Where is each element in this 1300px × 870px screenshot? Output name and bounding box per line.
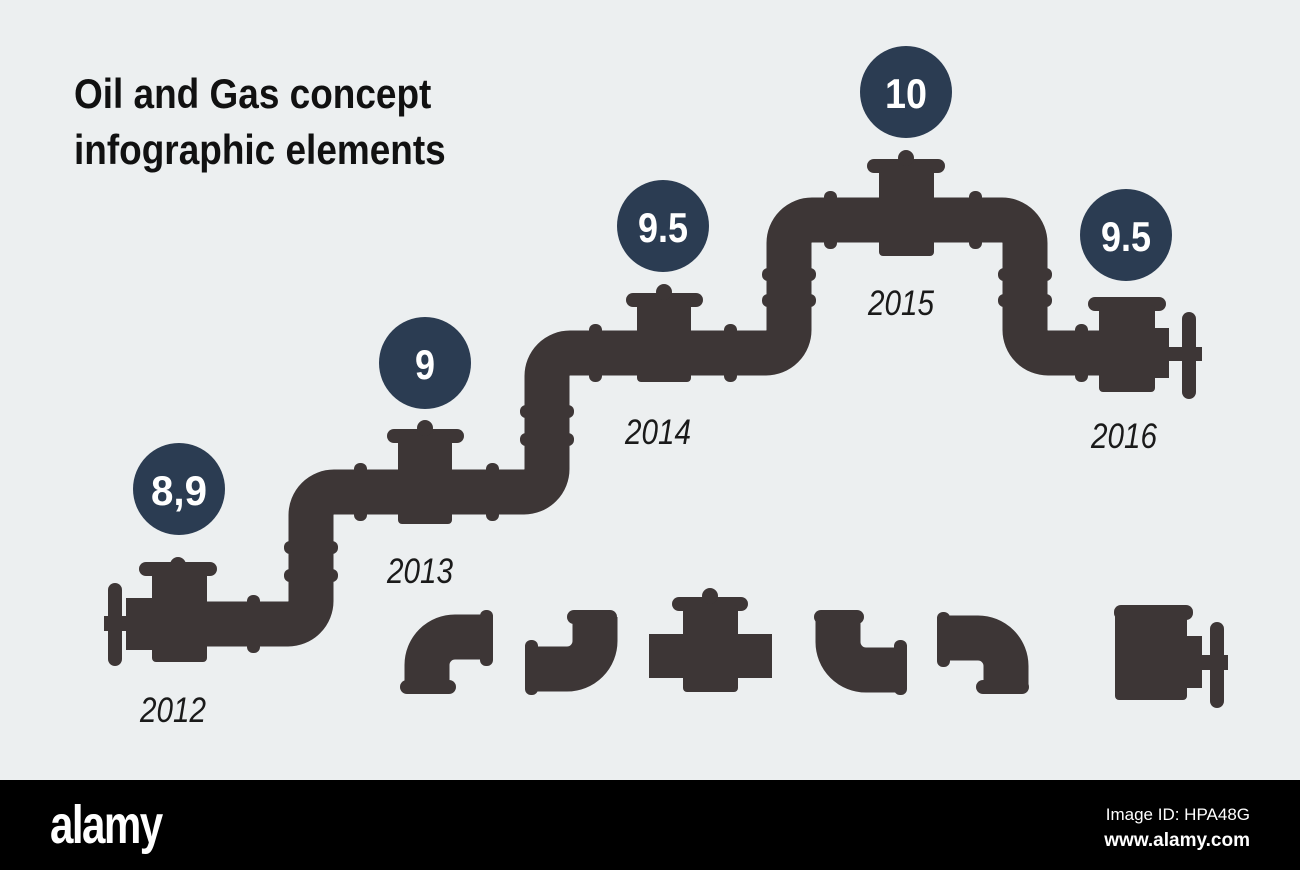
value circles [133, 46, 1172, 535]
main pipeline [130, 191, 1105, 653]
value labels: 9.5 [1101, 213, 1151, 260]
year labels [139, 284, 1157, 730]
footer logo: alamy [50, 795, 162, 855]
valve 2016 [1088, 297, 1202, 399]
year labels: 2014 [624, 413, 691, 452]
parts: elbow 4 [937, 612, 1029, 694]
valve 2015 [867, 150, 945, 256]
title: infographic elements [74, 126, 446, 173]
parts: elbow 1 [400, 610, 493, 694]
title: Oil and Gas concept [74, 70, 431, 117]
footer id: www.alamy.com [1104, 830, 1250, 851]
parts: end valve [1114, 605, 1228, 708]
value labels: 8,9 [151, 467, 207, 514]
title [74, 70, 446, 173]
value labels [151, 70, 1151, 514]
valve 2013 [387, 420, 464, 524]
year labels: 2012 [139, 691, 206, 730]
value labels: 9 [415, 341, 435, 388]
value labels: 10 [885, 70, 927, 117]
year labels: 2015 [867, 284, 934, 323]
footer id: Image ID: HPA48G [1106, 805, 1250, 824]
year labels: 2013 [386, 552, 453, 591]
parts: elbow 3 [814, 610, 907, 695]
parts: elbow 2 [525, 610, 617, 695]
footer id [1104, 805, 1250, 851]
footer bar [0, 780, 1300, 870]
valve 2012 [104, 557, 217, 666]
year labels: 2016 [1090, 417, 1157, 456]
parts: valve [649, 588, 772, 692]
valve 2014 [626, 284, 703, 382]
value labels: 9.5 [638, 204, 688, 251]
